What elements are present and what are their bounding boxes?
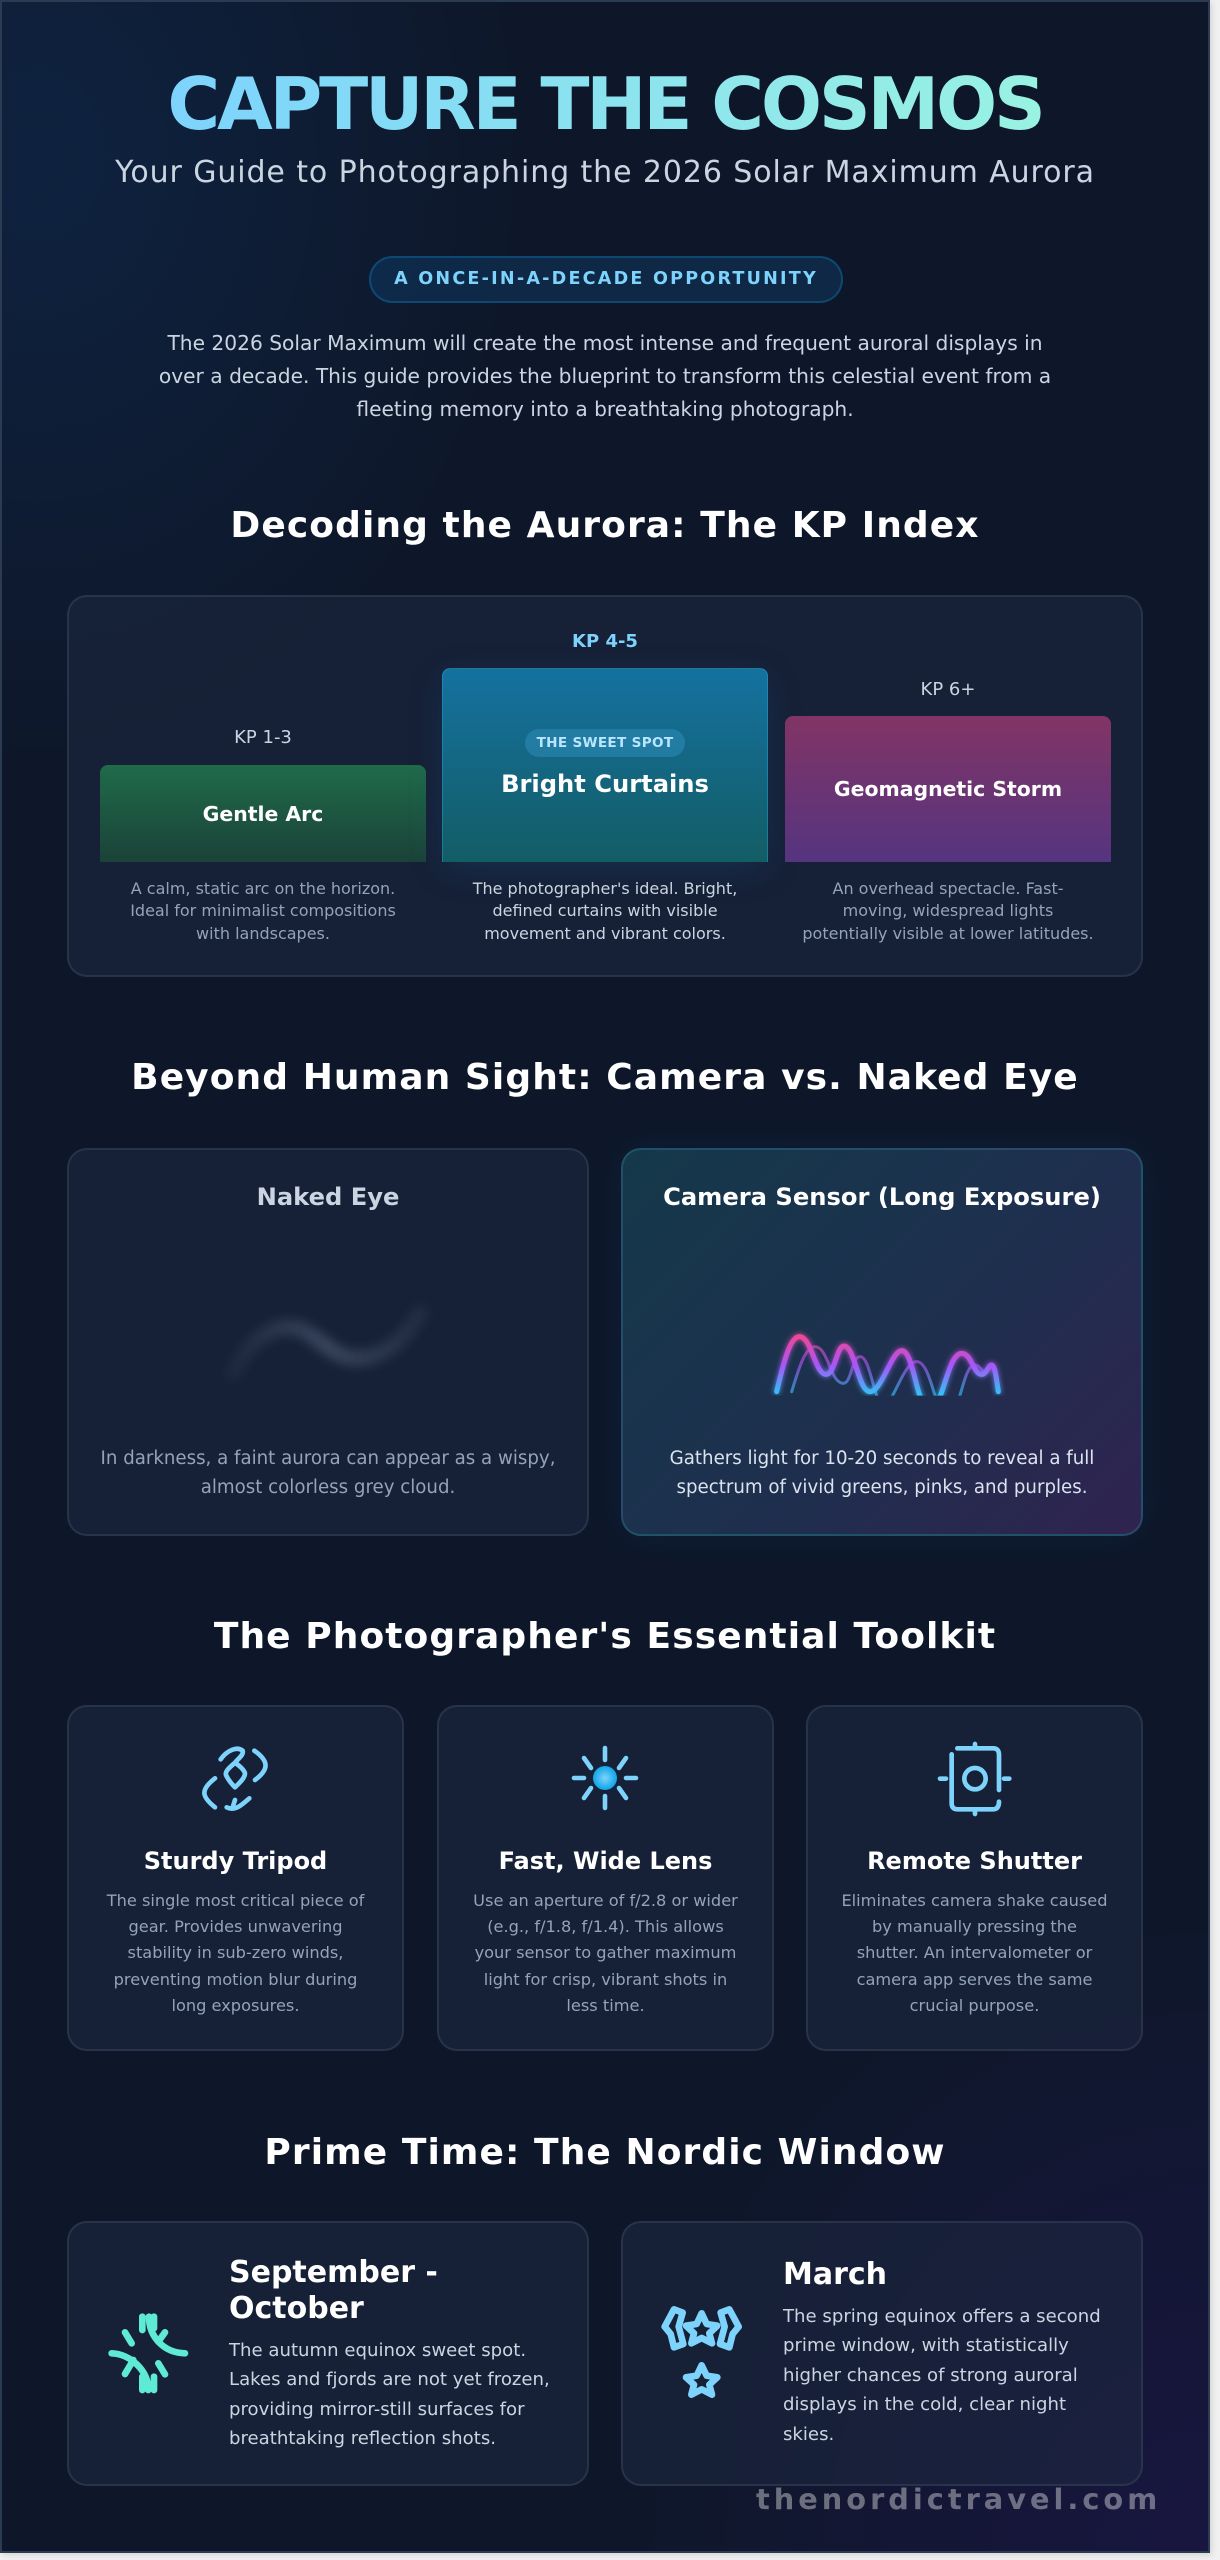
tripod text: long exposures. xyxy=(171,1996,300,2015)
tripod name: Sturdy Tripod xyxy=(144,1847,327,1875)
remote name: Remote Shutter xyxy=(867,1847,1082,1875)
tripod text xyxy=(106,1891,365,2015)
naked eye description xyxy=(101,1448,555,1498)
tripod text: The single most critical piece of xyxy=(107,1891,364,1910)
heading: KP index: Decoding the Aurora: The KP Index xyxy=(230,505,980,546)
panel: september xyxy=(67,2221,589,2486)
naked eye title: Naked Eye xyxy=(257,1183,399,1211)
KP 4-5 description: defined curtains with visible xyxy=(492,901,718,920)
panel: march xyxy=(621,2221,1143,2486)
heading: toolkit: The Photographer's Essential Toolkit xyxy=(214,1616,996,1657)
KP 1-3 description xyxy=(130,879,396,943)
tripod text: preventing motion blur during xyxy=(114,1970,357,1989)
september text: breathtaking reflection shots. xyxy=(229,2428,496,2449)
lens text: Use an aperture of f/2.8 or wider xyxy=(473,1891,738,1910)
KP 1-3 label: KP 1-3 xyxy=(234,727,292,748)
bar: gentle arc: Gentle Arc xyxy=(203,802,323,826)
lens text: less time. xyxy=(566,1996,645,2015)
sweet spot tag: THE SWEET SPOT xyxy=(537,735,673,751)
KP 4-5 description xyxy=(472,879,737,943)
panel: remote xyxy=(806,1705,1143,2051)
remote text: shutter. An intervalometer or xyxy=(857,1943,1092,1962)
remote text: Eliminates camera shake caused xyxy=(841,1891,1108,1910)
september text: The autumn equinox sweet spot. xyxy=(229,2340,526,2361)
camera sensor description xyxy=(670,1448,1094,1498)
tripod text: gear. Provides unwavering xyxy=(128,1917,343,1936)
bright curtains name: Bright Curtains xyxy=(501,770,709,798)
panel: lens xyxy=(437,1705,774,2051)
intro paragraph: over a decade. This guide provides the blueprint to transform this celestial event from a xyxy=(159,364,1051,388)
bar: geomagnetic storm: Geomagnetic Storm xyxy=(834,777,1062,801)
KP 6+ description xyxy=(802,879,1094,943)
march text: displays in the cold, clear night xyxy=(783,2394,1066,2415)
camera sensor description: Gathers light for 10-20 seconds to reveal a full xyxy=(670,1448,1094,1469)
remote text: camera app serves the same xyxy=(857,1970,1092,1989)
icon: equinox xyxy=(112,2317,185,2390)
september text: Lakes and fjords are not yet frozen, xyxy=(229,2369,550,2390)
badge: A ONCE-IN-A-DECADE OPPORTUNITY xyxy=(394,269,818,289)
lens name: Fast, Wide Lens xyxy=(499,1847,712,1875)
KP 1-3 description: Ideal for minimalist compositions xyxy=(130,901,396,920)
bar: geomagnetic storm xyxy=(785,716,1111,862)
march title: March xyxy=(783,2257,887,2292)
september text: providing mirror-still surfaces for xyxy=(229,2399,525,2420)
bar: bright curtains xyxy=(442,668,768,862)
march text: higher chances of strong auroral xyxy=(783,2365,1078,2386)
september text xyxy=(228,2340,550,2449)
lens text xyxy=(473,1891,738,2015)
march text xyxy=(782,2306,1101,2445)
sweet spot tag xyxy=(525,729,685,757)
intro paragraph: fleeting memory into a breathtaking photograph. xyxy=(356,397,854,421)
KP 4-5 description: The photographer's ideal. Bright, xyxy=(473,879,737,898)
panel: naked eye xyxy=(67,1148,589,1536)
icon: vivid aurora xyxy=(777,1337,998,1405)
icon: faint aurora wisp xyxy=(233,1313,420,1373)
icon: remote shutter xyxy=(940,1744,1009,1814)
panel: tripod xyxy=(67,1705,404,2051)
tripod text: stability in sub-zero winds, xyxy=(128,1943,343,1962)
remote text: by manually pressing the xyxy=(872,1917,1077,1936)
naked eye description: In darkness, a faint aurora can appear as a wispy, xyxy=(101,1448,555,1469)
subtitle: Your Guide to Photographing the 2026 Solar Maximum Aurora xyxy=(115,155,1095,190)
heading: prime time: Prime Time: The Nordic Window xyxy=(264,2132,946,2173)
KP 1-3 description: A calm, static arc on the horizon. xyxy=(131,879,395,898)
KP 4-5 description: movement and vibrant colors. xyxy=(484,924,726,943)
KP 6+ description: An overhead spectacle. Fast- xyxy=(832,879,1064,898)
artwork layer xyxy=(108,1310,1012,2398)
icon: lens xyxy=(574,1748,636,1808)
lens text: your sensor to gather maximum xyxy=(475,1943,736,1962)
lens text: (e.g., f/1.8, f/1.4). This allows xyxy=(487,1917,724,1936)
icon: tripod xyxy=(204,1749,266,1809)
naked eye description: almost colorless grey cloud. xyxy=(201,1477,455,1498)
september title: September - xyxy=(229,2255,438,2290)
camera sensor description: spectrum of vivid greens, pinks, and purples. xyxy=(677,1477,1087,1498)
september title: October xyxy=(229,2291,364,2326)
march text: The spring equinox offers a second xyxy=(783,2306,1101,2327)
remote text: crucial purpose. xyxy=(910,1996,1039,2015)
september title xyxy=(229,2255,438,2326)
intro paragraph xyxy=(159,331,1051,421)
bar: gentle arc xyxy=(100,765,426,862)
watermark: thenordictravel.com xyxy=(756,2482,1161,2516)
KP 1-3 description: with landscapes. xyxy=(196,924,330,943)
panel: camera sensor xyxy=(621,1148,1143,1536)
camera sensor title: Camera Sensor (Long Exposure) xyxy=(663,1183,1101,1211)
panel: KP index xyxy=(67,595,1143,977)
title: CAPTURE THE COSMOS xyxy=(167,62,1043,146)
icon: stars xyxy=(665,2309,739,2395)
lens text: light for crisp, vibrant shots in xyxy=(484,1970,727,1989)
KP 4-5 label: KP 4-5 xyxy=(572,631,638,652)
KP 6+ description: moving, widespread lights xyxy=(843,901,1053,920)
heading: camera vs eye: Beyond Human Sight: Camera vs. Naked Eye xyxy=(131,1057,1079,1098)
march text: prime window, with statistically xyxy=(783,2335,1069,2356)
badge xyxy=(369,256,843,303)
intro paragraph: The 2026 Solar Maximum will create the most intense and frequent auroral displays in xyxy=(167,331,1043,355)
KP 6+ label: KP 6+ xyxy=(921,679,975,700)
march text: skies. xyxy=(783,2424,834,2445)
KP 6+ description: potentially visible at lower latitudes. xyxy=(802,924,1094,943)
remote text xyxy=(841,1891,1108,2015)
